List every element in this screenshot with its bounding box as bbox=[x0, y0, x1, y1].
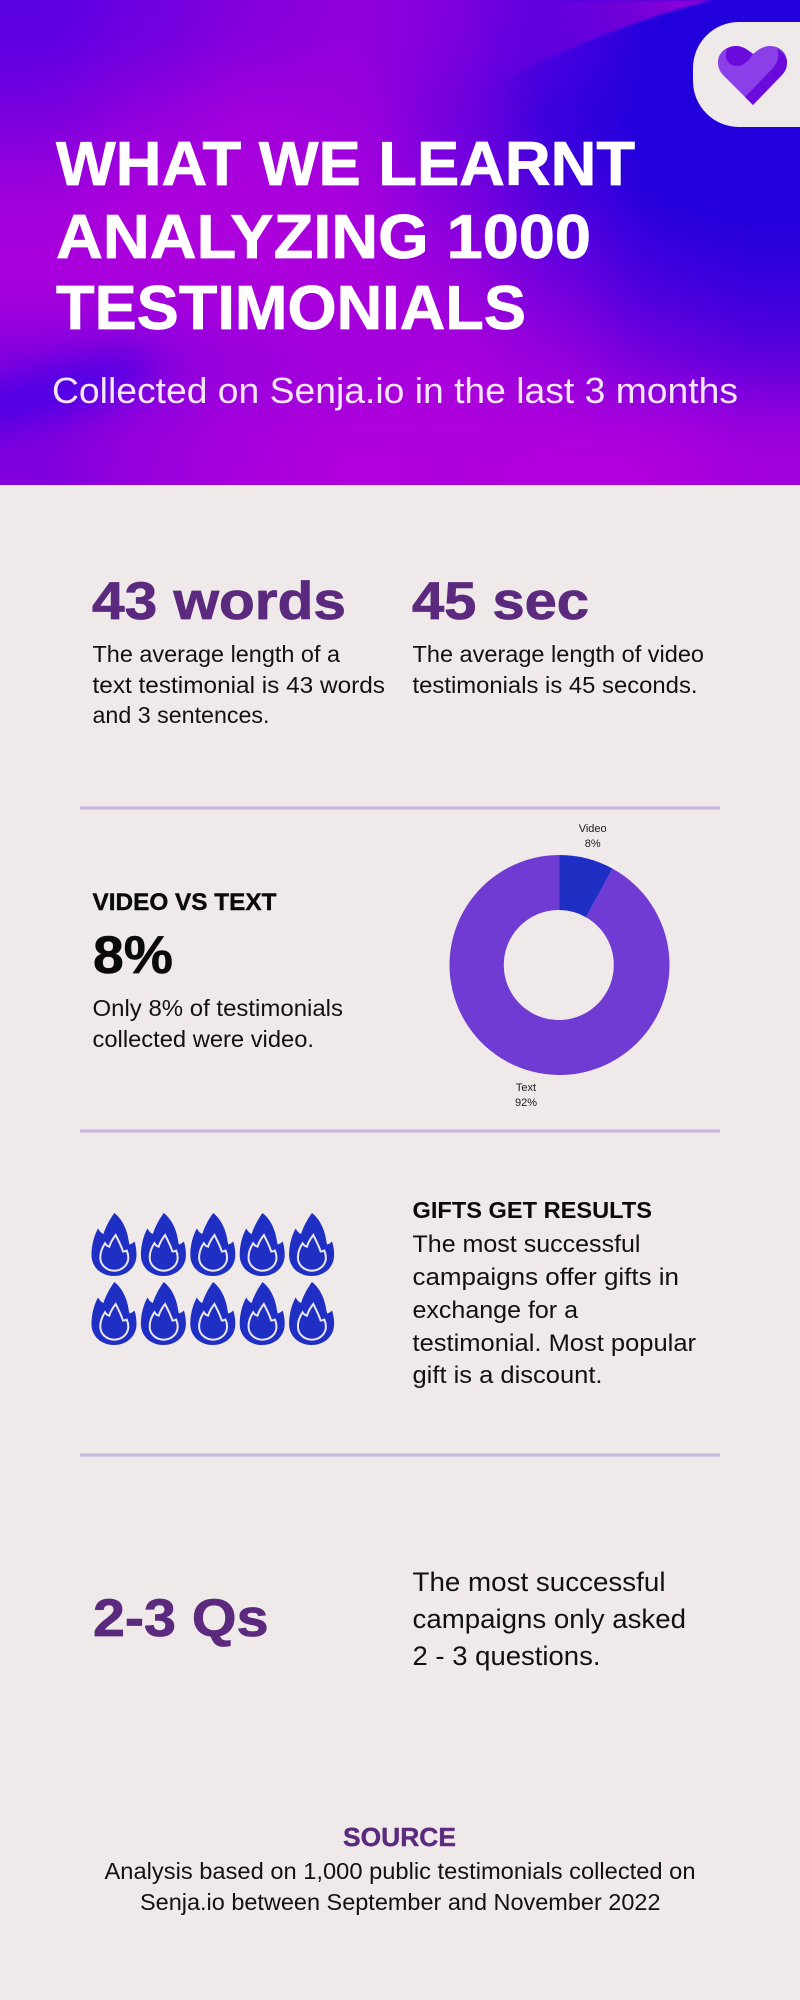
description: gift is a discount. bbox=[412, 1362, 602, 1389]
heading: source: SOURCE bbox=[343, 1822, 456, 1852]
description: The most successful bbox=[412, 1231, 640, 1258]
donut chart bbox=[450, 823, 670, 1109]
title: ANALYZING 1000 bbox=[56, 203, 591, 272]
title: WHAT WE LEARNT bbox=[56, 130, 635, 199]
panel: average length stats bbox=[92, 572, 704, 728]
label: video bbox=[579, 823, 607, 850]
description: 2 - 3 questions. bbox=[412, 1641, 600, 1671]
description: exchange for a bbox=[412, 1297, 579, 1324]
stat: 43 words: text testimonial is 43 words bbox=[92, 672, 385, 698]
heading: video vs text: VIDEO VS TEXT bbox=[92, 889, 277, 916]
stat: 2-3 Qs: 2-3 Qs bbox=[93, 1589, 268, 1648]
description bbox=[412, 1567, 686, 1671]
source text: Senja.io between September and November 2022 bbox=[140, 1889, 660, 1915]
stat: 43 words: The average length of a bbox=[92, 641, 340, 667]
stat: 43 words: 43 words bbox=[92, 572, 346, 631]
stat: 45 sec: The average length of video bbox=[412, 641, 704, 667]
description: The most successful bbox=[412, 1567, 666, 1597]
stat: 43 words: and 3 sentences. bbox=[92, 702, 270, 728]
panel: source bbox=[104, 1822, 696, 1915]
label: text bbox=[515, 1082, 537, 1109]
stat: 43 words bbox=[92, 572, 385, 728]
title: TESTIMONIALS bbox=[56, 274, 526, 343]
source text bbox=[104, 1858, 696, 1915]
logo card bbox=[693, 22, 800, 127]
stat: 45 sec: testimonials is 45 seconds. bbox=[412, 672, 698, 698]
description: collected were video. bbox=[92, 1026, 314, 1052]
description: campaigns offer gifts in bbox=[412, 1264, 679, 1291]
description bbox=[92, 995, 343, 1052]
subtitle: Collected on Senja.io in the last 3 months bbox=[52, 370, 738, 411]
title bbox=[56, 130, 635, 343]
label: video: Video bbox=[579, 823, 607, 835]
description: Only 8% of testimonials bbox=[92, 995, 343, 1021]
panel: video vs text bbox=[92, 823, 670, 1109]
stat: 8%: 8% bbox=[93, 926, 173, 985]
heading: gifts get results: GIFTS GET RESULTS bbox=[412, 1197, 652, 1223]
panel: hero header bbox=[0, 0, 800, 485]
icon: heart logo bbox=[718, 46, 787, 105]
label: text: Text bbox=[516, 1082, 536, 1094]
hero gradient background bbox=[0, 0, 800, 485]
stat: 45 sec bbox=[412, 572, 704, 698]
stat: 45 sec: 45 sec bbox=[412, 572, 589, 631]
panel: gifts get results bbox=[92, 1197, 696, 1389]
description: campaigns only asked bbox=[412, 1604, 686, 1634]
icons: fire grid bbox=[92, 1213, 334, 1345]
description: testimonial. Most popular bbox=[412, 1330, 696, 1357]
label: video: 8% bbox=[585, 838, 601, 850]
panel: questions bbox=[93, 1567, 686, 1671]
source text: Analysis based on 1,000 public testimonials collected on bbox=[104, 1858, 696, 1884]
description bbox=[412, 1231, 696, 1389]
label: text: 92% bbox=[515, 1097, 537, 1109]
